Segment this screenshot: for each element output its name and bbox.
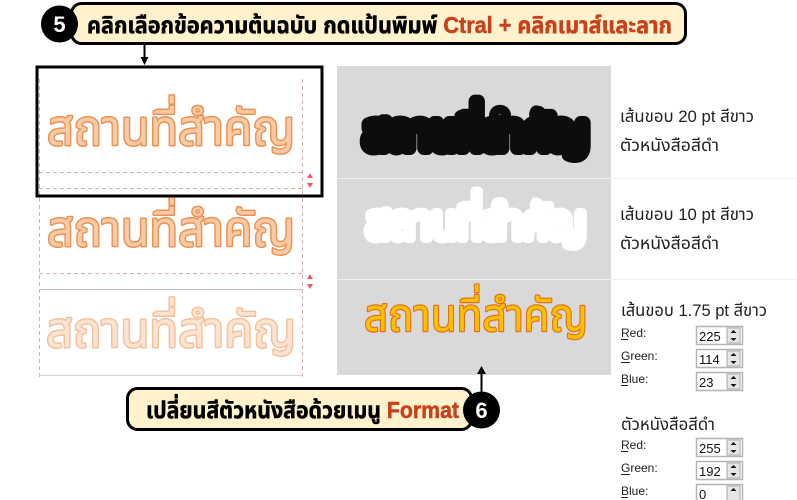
form: outline colour RGB: Green: bbox=[621, 349, 658, 363]
form: outline colour RGB bbox=[621, 326, 742, 390]
text block: row 2 label: ตัวหนังสือสีดำ bbox=[620, 234, 719, 253]
panel: original text copies with guides bbox=[39, 79, 313, 380]
callout: step 6 bbox=[128, 388, 500, 430]
text block: row 2 label bbox=[620, 204, 754, 253]
badge: number 5: 5 bbox=[53, 12, 66, 37]
arrow: from step 6 to sample bbox=[477, 366, 486, 392]
text block: row 1 label: เส้นขอบ 20 pt สีขาว bbox=[620, 106, 754, 126]
form: text colour RGB: Green: bbox=[621, 461, 658, 475]
form: outline colour RGB: Red: bbox=[621, 326, 646, 340]
text: step 5 instruction: คลิกเลือกข้อความต้นฉบับ กดแป้นพิมพ์ Ctral + คลิกเมาส์และลาก bbox=[87, 12, 672, 38]
text: step 6 instruction: เปลี่ยนสีตัวหนังสือด้วยเมนู Format bbox=[146, 394, 459, 424]
panel: grey samples bbox=[337, 66, 611, 375]
text: orange on yellow sample: สถานที่สำคัญ bbox=[364, 284, 588, 341]
form: text colour RGB bbox=[621, 438, 742, 500]
form: outline colour RGB: Blue: bbox=[621, 372, 648, 386]
text: black sample: สถานที่สำคัญ bbox=[364, 101, 588, 158]
icon: spacing arrows bottom bbox=[307, 274, 313, 289]
badge: number 5 bbox=[41, 6, 78, 42]
badge: number 6: 6 bbox=[475, 398, 488, 423]
text block: row 1 label: ตัวหนังสือสีดำ bbox=[620, 136, 719, 155]
text: solid orange copy: สถานที่สำคัญ bbox=[47, 95, 295, 156]
form: text colour RGB: Blue: bbox=[621, 484, 648, 498]
icon: spacing arrows top bbox=[307, 173, 313, 188]
arrow: from step 5 to selection bbox=[140, 44, 148, 65]
divider lines right bbox=[611, 178, 797, 280]
text: faded orange copy: สถานที่สำคัญ bbox=[46, 297, 296, 358]
callout: step 5 bbox=[41, 4, 686, 44]
spinner: green 192: 192 bbox=[699, 464, 721, 479]
spinner: red 255: 255 bbox=[699, 441, 721, 456]
text: middle orange copy: สถานที่สำคัญ bbox=[47, 196, 295, 257]
text block: row 1 label bbox=[620, 106, 754, 155]
text block: row 3 label: เส้นขอบ 1.75 pt สีขาว bbox=[621, 300, 767, 320]
text: text colour heading: ตัวหนังสือสีดำ bbox=[621, 415, 715, 434]
text: white sample: สถานที่สำคัญ bbox=[366, 191, 586, 248]
spinner: blue 23: 23 bbox=[699, 375, 713, 390]
spinner: green 114: 114 bbox=[699, 352, 720, 367]
form: text colour RGB: Red: bbox=[621, 438, 646, 452]
spinner: red 225: 225 bbox=[699, 329, 721, 344]
text block: row 2 label: เส้นขอบ 10 pt สีขาว bbox=[620, 204, 754, 224]
badge: number 6 bbox=[463, 392, 500, 428]
selection frame bbox=[37, 67, 322, 196]
